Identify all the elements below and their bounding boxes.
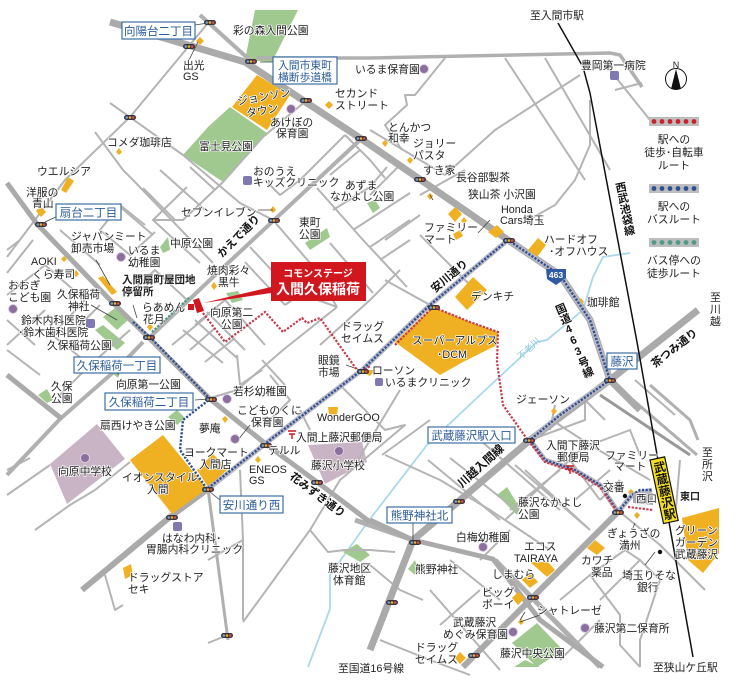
place labels: north-east: いるま保育園 [355,62,420,76]
place labels: south-east: 沢 [702,469,713,483]
place labels: central: 向原第一公園 [116,377,181,391]
place labels: north-west: 黒牛 [218,276,240,289]
route 463 shield [546,269,566,285]
place labels: central: 保育園 [251,415,283,429]
place labels: central: いるまクリニック [385,376,471,389]
place labels: north-west: あけぼの [270,116,313,129]
place labels: north-east: 豊岡第一病院 [581,58,646,72]
place labels: central: 藤沢小学校 [311,458,365,472]
place labels: north-west: 久保稲荷公園 [47,338,112,352]
small orange markers [61,37,640,625]
place labels: north-west: くら寿司 [32,267,75,281]
place labels: north-west: ジャパンミート [71,230,147,243]
place labels: north-west: 出光 [183,58,205,72]
bus route: blue dotted [133,240,652,512]
place labels: north-west: 公園 [299,228,321,241]
place labels: north-east: とんかつ [388,121,431,134]
place labels: south-east: 白梅幼稚園 [456,530,510,544]
place labels: north-east: ストリート [335,100,389,112]
road names: 安川通り [428,256,471,295]
place labels: north-east: 長谷部製茶 [456,170,510,184]
place labels: north-east: Cars埼玉 [500,213,545,227]
road names: 不老川 [515,335,542,361]
place labels: north-west: 洋服の [26,185,58,199]
place labels: south-east: めぐみ保育園 [443,627,508,641]
place labels: north-east: 和幸 [388,132,410,145]
place labels: central [51,319,498,675]
place labels: south-east: TAIRAYA [514,553,559,565]
place labels: central: 扇西けやき公園 [100,419,176,432]
place labels: north-east: 珈琲館 [587,296,620,309]
place labels: central: 公園 [51,392,73,405]
place labels: central: 市場 [318,366,340,379]
place labels: central: セキ [128,583,150,596]
place labels: south-east [415,394,718,674]
place labels: central: 夢庵 [199,421,221,435]
place labels: north-west: 花月 [143,313,165,326]
legend: バスルート [647,214,701,226]
place labels: central: テルル [268,445,301,457]
place labels: north-east: 至 [710,292,721,304]
property marker [188,298,204,313]
place labels: north-west: 保育園 [276,126,308,140]
parks [38,10,563,667]
place labels: south-east: しまむら [492,568,535,581]
place labels: north-west: タウン [245,102,279,120]
place labels: north-west: GS [183,71,199,83]
place labels: south-east: ファミリー [605,450,659,462]
road names [214,180,700,520]
road names: 国道463号線 [552,301,596,381]
intersection name boxes: 久保稲荷一丁目 [77,358,157,372]
place labels: north-west: 中原公園 [170,237,213,250]
place labels: central: GS [249,475,265,487]
place labels: north-west: 停留所 [122,285,154,298]
place labels: north-east: Honda [501,204,533,216]
water: rivers [308,253,630,667]
intersection name boxes: 安川通り西 [223,499,280,512]
railway [558,23,693,657]
place labels: south-east: 藤沢中央公園 [500,646,565,660]
place labels: north-east: あずま [345,179,377,192]
place labels: north-west: コメダ珈琲店 [107,135,172,149]
place labels: south-east: ジェーソン [516,394,570,406]
place labels: central: こどものくに [237,404,302,417]
place labels: central: 眼鏡 [318,354,340,367]
place labels: south-east: 銀行 [637,580,659,594]
walk and bicycle route: red dotted [203,307,653,510]
intersection name boxes: 藤沢 [610,354,634,368]
place labels: north-west: キッズクリニック [253,175,339,189]
place labels: central: 胃腸内科クリニック [146,542,243,556]
place labels: south-east: 至狭山ケ丘駅 [653,661,718,674]
schools [50,424,367,504]
place labels: south-east: 交番 [603,481,625,494]
place labels: south-east: 郵便局 [557,451,589,464]
place labels: north-west: 公園 [221,318,243,331]
place labels: north-west [8,23,339,352]
place labels: central: 向原中学校 [58,464,112,478]
place labels: south-east: ボーイ [482,598,514,611]
place labels: north-west: 鈴木内科医院 [21,313,86,327]
road names: 西武池袋線 [613,180,636,238]
place labels: north-west: 神社 [68,299,90,313]
place labels: north-west: セブンイレブン [181,205,257,219]
title callout: 入間久保稲荷 [276,281,360,297]
intersection name boxes: 熊野神社北 [391,508,449,522]
place labels: south-east: 東口 [680,490,700,503]
place labels: north-east: ファミリー [424,222,478,234]
place labels: south-east: 西口 [636,493,657,505]
place labels: north-east: ジョリー [413,138,456,150]
place labels: south-east: 所 [702,458,713,471]
place labels: south-east: 武蔵藤沢 [453,615,496,629]
place labels: north-east: 狭山茶 小沢園 [468,187,536,201]
place labels: south-east: マート [614,461,646,473]
legend: 徒歩･自転車 [644,145,704,159]
place labels: north-west: 富士見公園 [199,140,253,153]
legend: ルート [658,160,690,172]
intersection name boxes: 武蔵藤沢駅入口 [431,428,512,442]
place labels: south-east: シャトレーゼ [537,604,602,617]
place labels: south-east: 至 [702,447,713,459]
shops: orange blocks [36,75,719,664]
walking route to bus stop: green dotted [152,297,190,332]
place labels: south-east: 薬品 [591,566,613,579]
place labels: south-east: ドラッグ [415,640,458,654]
place labels: south-east: ビッグ [482,585,515,599]
place labels: north-east: セカンド [335,87,378,100]
place labels: north-west: AOKI [31,256,57,268]
place labels: central: ヨークマート [184,446,249,459]
title callout: コモンステージ [283,268,353,280]
place labels: central: 久保 [51,379,73,393]
place labels: central: 入間店 [199,458,232,471]
place labels: central: 藤沢地区 [328,561,371,575]
place labels: north-west: 東町 [299,216,321,229]
place labels: north-east: 至入間市駅 [530,9,584,22]
place labels: north-west: 彩の森入間公園 [233,23,309,37]
place labels: north-east: パスタ [413,149,445,162]
place labels: north-west: おおぎ [8,278,41,292]
place labels: south-east: グリーン [675,523,718,537]
place labels: north-west: ウエルシア [37,165,91,178]
intersection name boxes: 横断歩道橋 [278,70,332,84]
facility icons [8,64,662,636]
place labels: north-east: マート [424,234,456,246]
place labels: south-east: 満州 [619,539,641,552]
place labels: central: イオンスタイル [122,471,198,484]
place labels: south-east: セイムス [415,653,458,666]
place labels: south-east: 武蔵藤沢 [675,547,718,561]
legend: 駅への [658,133,690,146]
place labels: north-east: すき家 [423,163,456,177]
route 463 shield: 463 [549,270,563,280]
road names: 川越入間線 [455,441,507,490]
place labels: south-east: 入間下藤沢 [546,438,600,452]
place labels: central: ENEOS [249,464,287,476]
place labels: north-east [330,9,721,328]
place labels: north-west: いるま [128,244,160,257]
place labels: south-east: カワチ [581,554,613,567]
place labels: north-west: ジョンソン [236,87,292,108]
place labels: central: WonderGOO [317,412,380,424]
place labels: central: 至国道16号線 [338,661,404,675]
intersection name boxes [56,22,637,523]
place labels: north-east: ハードオフ [544,233,598,246]
legend [644,117,704,280]
place labels: north-west: こども園 [8,291,51,304]
place labels: north-west: 焼肉彩々 [207,264,250,277]
place labels: north-east: ･オフハウス [549,245,608,258]
intersection name boxes: 入間市東町 [278,59,332,72]
place labels: central: 体育館 [333,573,366,587]
legend: バス停への [647,254,701,267]
place labels: south-east: 埼玉りそな [622,568,676,582]
place labels: south-east: 藤沢なかよし [518,495,582,509]
place labels: central: ローソン [372,365,415,377]
north arrow [666,60,686,90]
place labels: north-west: 向原第二 [210,305,253,319]
place labels: south-east: 熊野神社 [415,562,458,576]
place labels: north-west: おのうえ [253,165,296,178]
place labels: north-west: 久保稲荷 [57,287,100,301]
leader lines [45,23,655,622]
place labels: central: ドラッグストア [128,570,204,584]
road names: かえで通り [214,212,263,260]
title callout [203,262,366,303]
place labels: north-west: 入間扇町屋団地 [122,273,196,286]
north arrow: N [673,60,679,70]
place labels: north-west: ･鈴木歯科医院 [18,325,88,339]
intersection name boxes: 扇台二丁目 [60,206,117,220]
place labels: central: 若杉幼稚園 [233,384,287,398]
road names: 茶つみ通り [648,325,700,370]
legend: 徒歩ルート [647,266,701,280]
traffic signals [35,20,624,658]
place labels: south-east: 公園 [518,508,540,521]
place labels: central: セイムス [341,332,384,345]
place labels: north-west: 青山 [32,197,54,210]
place labels: south-east: エコス [524,541,556,553]
place labels: north-west: 卸売市場 [71,241,114,255]
intersection name boxes: 久保稲荷二丁目 [109,395,189,409]
place labels: north-west: らあめん [142,301,185,314]
place labels: north-east: 川 [710,304,721,316]
place labels: central: スーパーアルプス [412,334,498,347]
place labels: south-east: 藤沢第二保育所 [594,621,670,635]
intersection name boxes: 向陽台二丁目 [124,24,193,38]
place labels: south-east: ガーデン [675,535,718,549]
place labels: north-west: 幼稚園 [128,256,160,269]
legend: 駅への [658,200,690,213]
road names: 花みずき通り [287,469,348,520]
place labels: central: はなわ内科･ [162,531,221,545]
place labels: central: ･DCM [437,349,467,361]
place labels: south-east: ぎょうざの [607,526,660,540]
place labels: central: 入間上藤沢郵便局 [296,430,382,444]
place labels: north-east: なかよし公園 [330,190,394,203]
station label: 武蔵藤沢駅 [651,459,677,522]
place labels: central: ドラッグ [341,319,384,333]
place labels: north-east: 越 [710,314,721,328]
place labels: central: 入間 [147,483,169,496]
west exit area [633,493,653,505]
place labels: north-east: デンキチ [471,289,514,303]
